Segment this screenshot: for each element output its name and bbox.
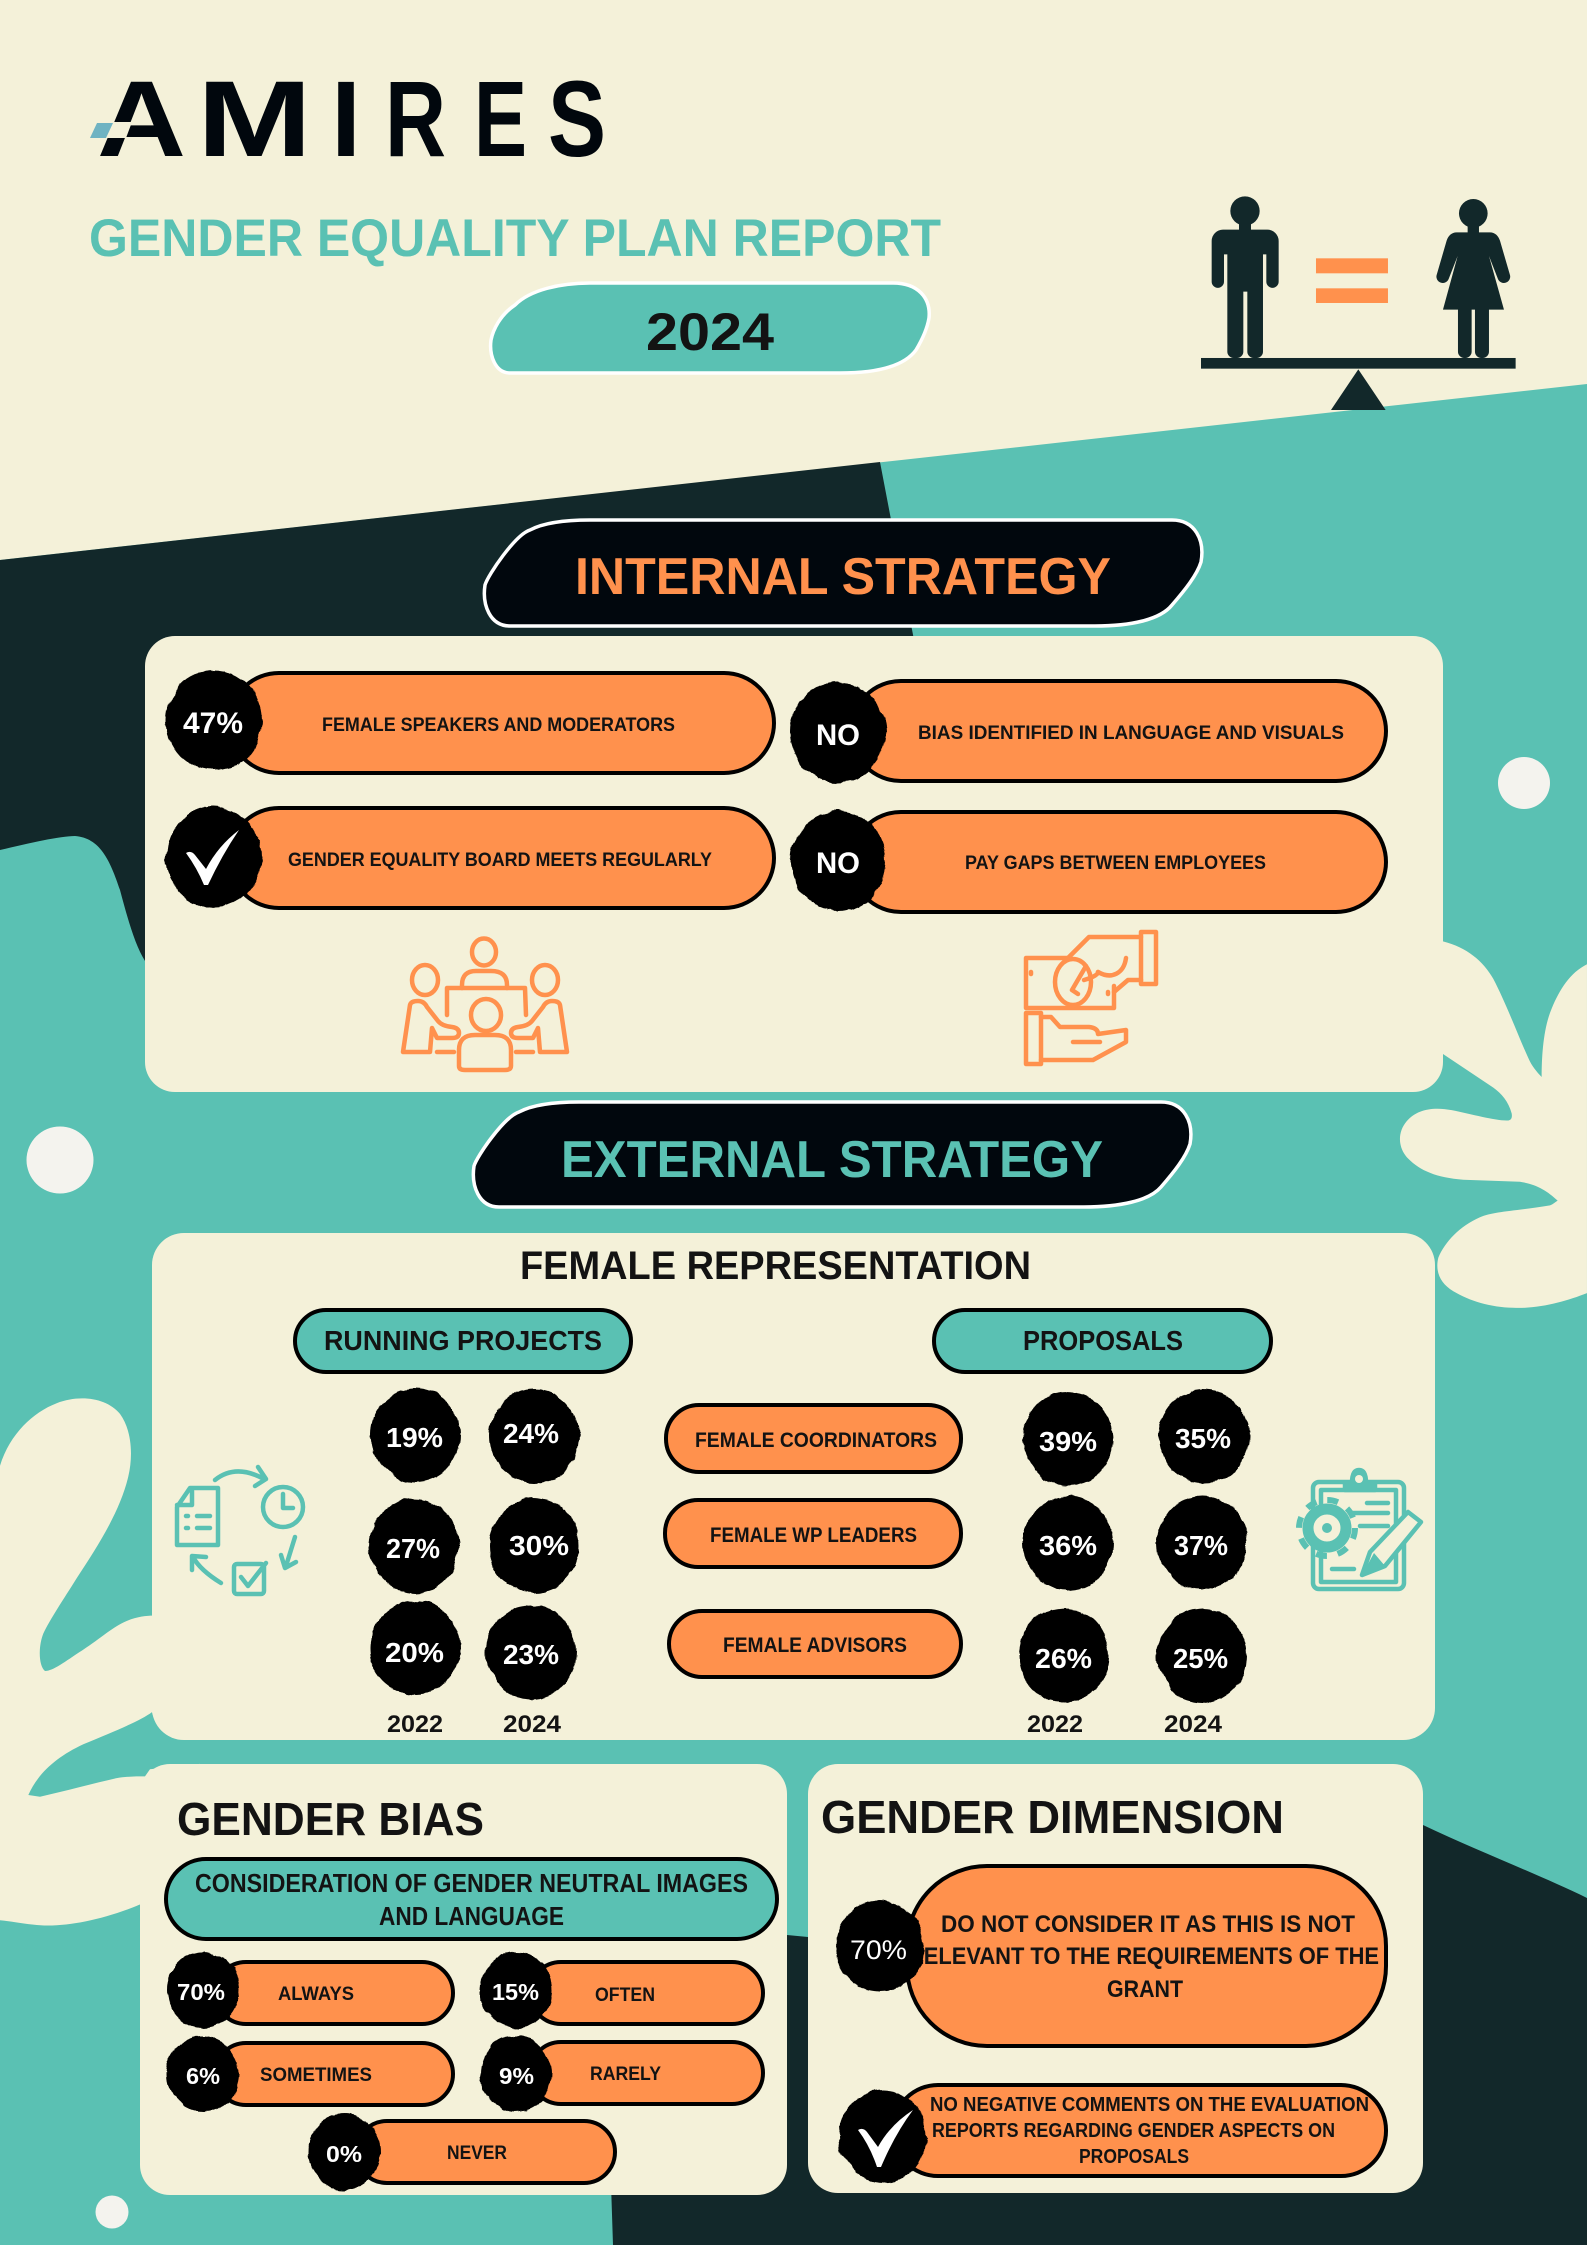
- logo: Amires: A: [97, 58, 186, 179]
- label: female advisors: [669, 1611, 961, 1677]
- title: GENDER EQUALITY PLAN REPORT: [89, 209, 941, 268]
- stat: female speakers: [166, 671, 774, 773]
- answer: never: [308, 2114, 615, 2190]
- logo: Amires: R: [385, 58, 446, 179]
- icon: clipboard and gear: [1299, 1470, 1421, 1589]
- finding: no negative comments: REPORTS REGARDING GENDER ASPECTS ON: [932, 2120, 1335, 2142]
- finding: not relevant to the grant: [836, 1866, 1386, 2046]
- icon: money exchange: [1026, 932, 1156, 1064]
- data: proposals percentages: 37%: [1174, 1530, 1228, 1561]
- data: running projects percentages: 19%: [386, 1422, 443, 1453]
- panel: gender bias: [140, 1764, 787, 2195]
- answer: never: NEVER: [447, 2143, 507, 2164]
- data: running projects percentages: 20%: [385, 1637, 444, 1668]
- finding: not relevant to the grant: RELEVANT TO THE REQUIREMENTS OF THE: [908, 1943, 1379, 1970]
- panel: gender dimension: [808, 1764, 1423, 2193]
- data: running projects percentages: [369, 1388, 579, 1699]
- decorative circle: left: [26, 1126, 94, 1194]
- answer: always: [167, 1952, 453, 2028]
- question: gender neutral images: CONSIDERATION OF GENDER NEUTRAL IMAGES: [195, 1868, 748, 1898]
- decorative circle: bottom: [96, 2196, 128, 2228]
- axis labels: years: 2024: [503, 1711, 562, 1738]
- answer: sometimes: [167, 2036, 453, 2112]
- heading: gender bias: GENDER BIAS: [177, 1793, 484, 1845]
- background: left cream blob: [0, 1398, 200, 1925]
- answer: rarely: 9%: [499, 2063, 534, 2089]
- stat: bias in language: [790, 681, 1386, 782]
- axis labels: years: 2022: [1027, 1711, 1083, 1738]
- background: dark lower-right shape: [605, 1770, 1587, 2245]
- finding: no negative comments: NO NEGATIVE COMMENTS ON THE EVALUATION: [930, 2094, 1369, 2116]
- data: proposals percentages: 35%: [1175, 1423, 1231, 1454]
- heading: female representation: FEMALE REPRESENTATION: [520, 1244, 1031, 1288]
- data: running projects percentages: 24%: [503, 1418, 559, 1449]
- heading: external strategy: [473, 1102, 1191, 1207]
- panel: female representation: [152, 1233, 1435, 1740]
- heading: internal strategy: [484, 520, 1202, 626]
- data: proposals percentages: 36%: [1039, 1530, 1097, 1561]
- logo: Amires: S: [548, 58, 606, 179]
- data: running projects percentages: 30%: [509, 1530, 569, 1561]
- label: proposals: PROPOSALS: [1023, 1325, 1183, 1356]
- logo: Amires: I: [331, 58, 361, 179]
- icon: meeting: [403, 938, 567, 1070]
- data: running projects percentages: 23%: [503, 1639, 559, 1670]
- answer: often: 15%: [492, 1979, 539, 2005]
- answer: often: [480, 1952, 763, 2028]
- stat: pay gaps: [790, 811, 1386, 912]
- answer: often: OFTEN: [595, 1985, 655, 2006]
- icon: project cycle: [177, 1467, 303, 1594]
- label: running projects: RUNNING PROJECTS: [324, 1325, 602, 1356]
- axis labels: years: [387, 1711, 1223, 1738]
- answer: always: ALWAYS: [278, 1984, 354, 2005]
- logo: Amires: M: [197, 58, 312, 179]
- question: gender neutral images: [166, 1859, 777, 1939]
- question: gender neutral images: AND LANGUAGE: [379, 1901, 564, 1931]
- label: running projects: [295, 1310, 631, 1372]
- stat: female speakers: 47%: [183, 707, 243, 740]
- finding: not relevant to the grant: DO NOT CONSIDER IT AS THIS IS NOT: [941, 1911, 1355, 1938]
- answer: sometimes: SOMETIMES: [260, 2065, 372, 2086]
- stat: pay gaps: PAY GAPS BETWEEN EMPLOYEES: [965, 852, 1266, 874]
- heading: internal strategy: INTERNAL STRATEGY: [575, 548, 1111, 606]
- finding: not relevant to the grant: GRANT: [1107, 1976, 1183, 2003]
- data: proposals percentages: 25%: [1173, 1643, 1228, 1674]
- background: right cream blob: [1400, 941, 1587, 1308]
- year badge: 2024: [646, 303, 775, 362]
- axis labels: years: 2024: [1164, 1711, 1223, 1738]
- label: female WP leaders: [665, 1500, 961, 1567]
- panel: internal strategy: [145, 636, 1443, 1092]
- stat: pay gaps: NO: [816, 847, 860, 880]
- heading: external strategy: EXTERNAL STRATEGY: [561, 1131, 1103, 1189]
- answer: sometimes: 6%: [186, 2063, 220, 2089]
- logo: Amires: [84, 58, 606, 179]
- answer: always: 70%: [177, 1979, 225, 2005]
- label: female WP leaders: FEMALE WP LEADERS: [710, 1524, 917, 1547]
- finding: no negative comments: [839, 2085, 1386, 2183]
- answer: rarely: [480, 2036, 763, 2112]
- answer: never: 0%: [326, 2141, 362, 2167]
- heading: gender dimension: GENDER DIMENSION: [821, 1791, 1284, 1843]
- stat: bias in language: NO: [816, 719, 860, 752]
- finding: no negative comments: PROPOSALS: [1079, 2146, 1189, 2168]
- background: dark upper-left shape: [0, 462, 920, 961]
- logo: Amires: E: [474, 58, 527, 179]
- label: female advisors: FEMALE ADVISORS: [723, 1634, 907, 1657]
- stat: female speakers: FEMALE SPEAKERS AND MODERATORS: [322, 714, 675, 736]
- label: proposals: [934, 1310, 1271, 1372]
- year badge: [491, 283, 929, 373]
- decorative circle: right: [1498, 757, 1550, 809]
- stat: equality board: [166, 807, 774, 908]
- answer: rarely: RARELY: [590, 2064, 661, 2085]
- data: proposals percentages: 26%: [1035, 1643, 1092, 1674]
- label: female coordinators: FEMALE COORDINATORS: [695, 1429, 937, 1452]
- axis labels: years: 2022: [387, 1711, 443, 1738]
- stat: equality board: GENDER EQUALITY BOARD MEETS REGULARLY: [288, 849, 712, 871]
- icon: gender equality seesaw: [1201, 196, 1516, 410]
- label: female coordinators: [666, 1405, 961, 1472]
- stat: bias in language: BIAS IDENTIFIED IN LANGUAGE AND VISUALS: [918, 722, 1344, 744]
- data: running projects percentages: 27%: [386, 1533, 440, 1564]
- data: proposals percentages: 39%: [1039, 1426, 1097, 1457]
- data: proposals percentages: [1019, 1389, 1249, 1703]
- finding: not relevant to the grant: 70%: [850, 1935, 907, 1965]
